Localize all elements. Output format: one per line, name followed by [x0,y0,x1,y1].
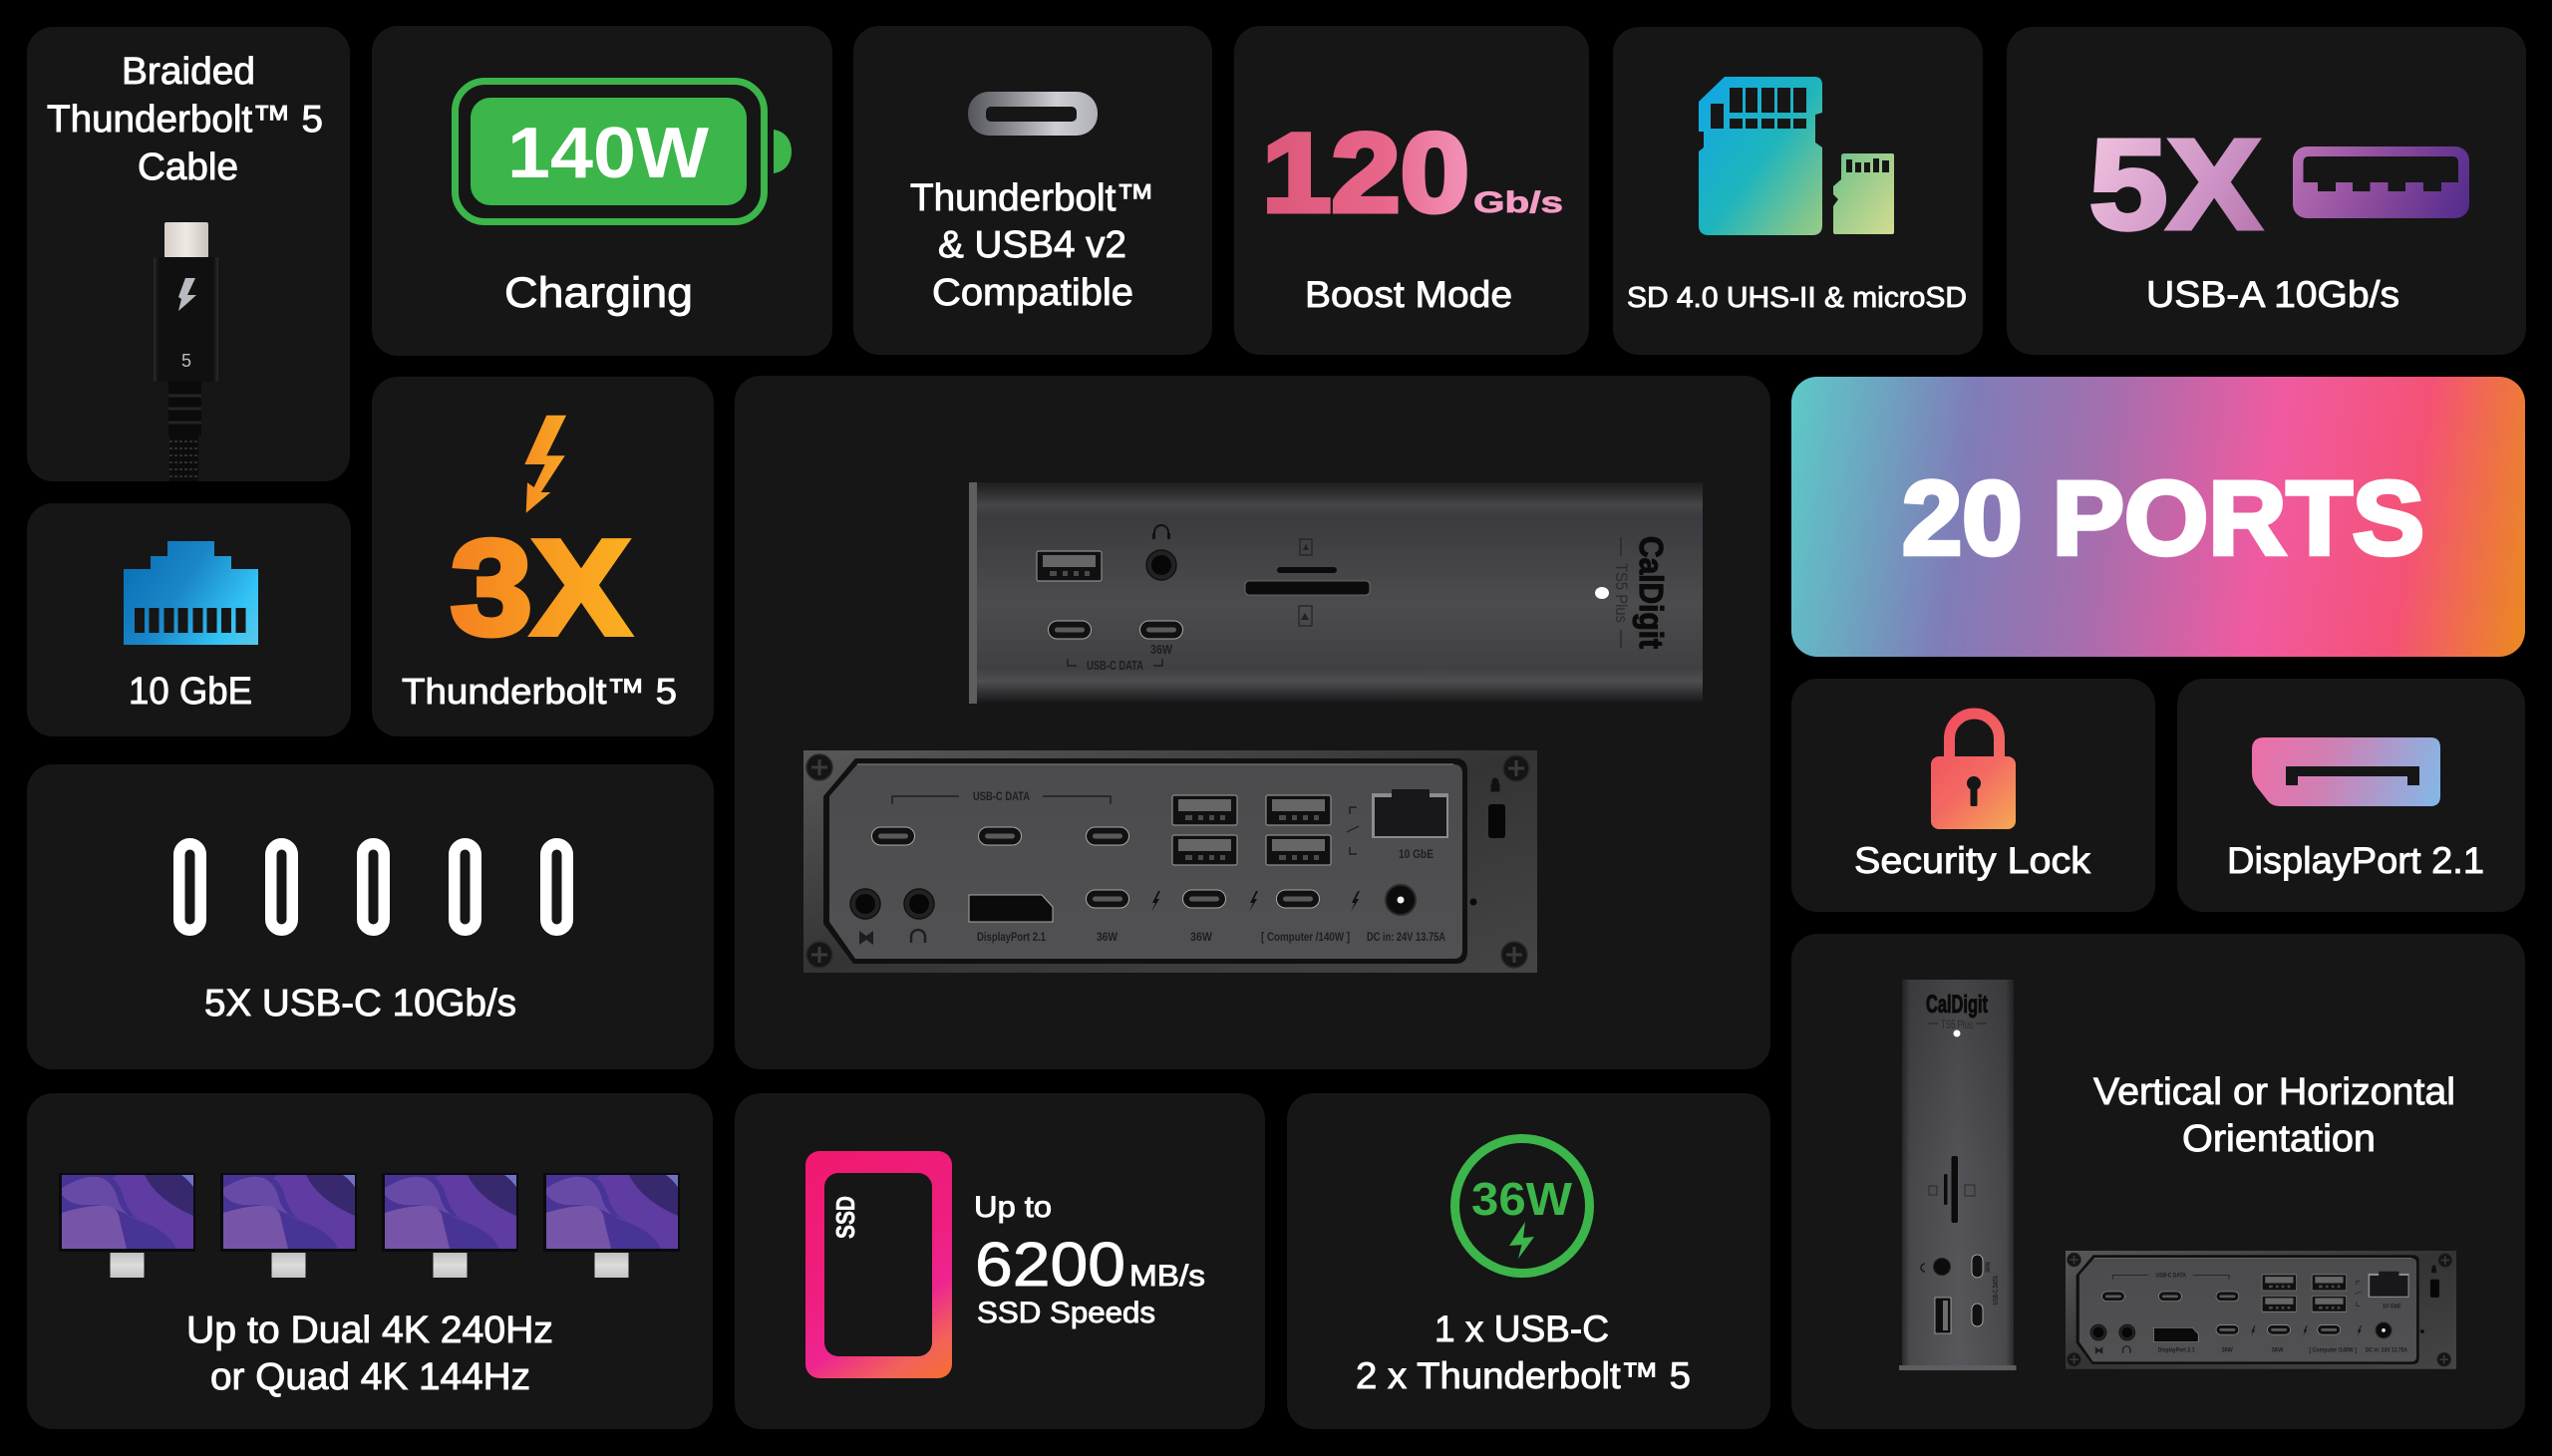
figure: 5X: 5X [2089,114,2261,256]
panel: 36W ports [1287,1093,1770,1429]
icon: microSD card [1833,153,1894,234]
icon: SSD: SSD [830,1196,860,1239]
heading: orientation: Orientation [2182,1118,2376,1160]
dock rear view: 36W [1190,930,1213,944]
heading: braided thunderbolt 5 cable [47,51,323,188]
heading: braided thunderbolt 5 cable: Braided [122,51,255,93]
panel: security lock [1791,679,2155,912]
dock front view: TS5 Plus [1612,563,1631,623]
icon: USB-C port [968,92,1098,136]
heading: orientation: Vertical or Horizontal [2093,1071,2455,1113]
icon: ethernet port [124,541,258,645]
text: up to 6200 MB/s SSD speeds: 6200 [975,1231,1125,1300]
figure: 120 Gb/s [1262,111,1563,235]
icon: thunderbolt bolt [524,416,566,513]
panel: USB-A [2007,27,2526,355]
icon: monitor 1 [59,1173,195,1278]
dock front view [969,482,1703,704]
icon: monitor 3 [382,1173,518,1278]
label: USB-C and thunderbolt counts: 2 x Thunderbolt™ 5 [1356,1355,1691,1396]
label: SD 4.0 UHS-II and microSD: SD 4.0 UHS-II & microSD [1627,282,1967,314]
icon: thunderbolt cable [154,222,218,481]
panel: boost mode [1234,26,1589,355]
panel: thunderbolt and USB4 compatible [853,26,1212,355]
panel: displayport [2177,679,2525,912]
dock rear view: 36W [1097,930,1118,944]
icon: displayport connector [2252,737,2440,806]
label: 5X USB-C 10Gb/s: 5X USB-C 10Gb/s [204,983,516,1024]
dock rear view: USB-C DATA [973,789,1030,803]
panel: 140W charging [372,26,832,356]
panel: 3X thunderbolt 5 [372,377,714,736]
label: thunderbolt USB4 v2 compatible: Compatible [932,272,1133,314]
dock rear view: [ Computer /140W ] [1261,930,1350,944]
icon: 36W circle [1455,1138,1589,1274]
label: thunderbolt USB4 v2 compatible [910,177,1154,314]
dock rear view: 10 GbE [1399,847,1434,861]
panel: braided cable [27,27,350,481]
dock vertical view: CalDigit [1926,991,1988,1019]
icon: padlock [1931,714,2016,829]
label: displayport 2.1: DisplayPort 2.1 [2227,840,2484,881]
text: up to 6200 MB/s SSD speeds: MB/s [1129,1260,1205,1293]
icon: battery: 140W [507,114,709,193]
panel: SD cards [1613,27,1983,355]
dock front view: 36W [1150,642,1173,657]
label: thunderbolt 5: Thunderbolt™ 5 [402,671,677,712]
panel: dock front and rear views [735,376,1770,1069]
dock front view: USB-C DATA [1087,658,1143,673]
figure: 120 Gb/s: Gb/s [1473,186,1563,219]
label: display support: Up to Dual 4K 240Hz [186,1310,553,1351]
dock rear view: DC in: 24V 13.75A [1367,930,1445,944]
panel: displays [27,1093,713,1429]
figure: 3X: 3X [451,512,630,663]
dock rear view, small: DisplayPort 2.1 [2158,1347,2195,1354]
dock vertical view: USB-C DATA [1993,1276,2000,1305]
label: thunderbolt USB4 v2 compatible: Thunderbolt™ [910,177,1154,219]
label: USB-C and thunderbolt counts: 1 x USB-C [1435,1309,1609,1349]
dock rear view, small: 10 GbE [2383,1304,2401,1310]
panel: 20 ports banner [1791,377,2525,657]
dock vertical view: 36W [1986,1262,1992,1273]
panel: vertical or horizontal orientation [1791,934,2525,1429]
label: boost mode: Boost Mode [1305,274,1512,315]
label: thunderbolt USB4 v2 compatible: & USB4 v2 [938,224,1126,266]
panel: 10 GbE [27,503,351,736]
heading: braided thunderbolt 5 cable: Thunderbolt™ 5 [47,99,323,141]
dock rear view: DisplayPort 2.1 [977,930,1046,944]
heading: 20 ports: 20 PORTS [1902,460,2424,577]
icon: five USB-C ports [179,844,567,930]
label: display support: or Quad 4K 144Hz [210,1356,530,1398]
panel: 5X USB-C [27,764,714,1069]
label: USB-A 10Gb/s: USB-A 10Gb/s [2146,274,2399,315]
icon: USB-A port [2293,146,2469,218]
dock rear view, small [2066,1251,2456,1369]
heading: braided thunderbolt 5 cable: Cable [138,146,238,188]
icon: monitor 4 [543,1173,680,1278]
dock rear view, small: 36W [2272,1347,2284,1354]
text: up to 6200 MB/s SSD speeds [974,1191,1205,1329]
label: USB-C and thunderbolt counts [1356,1309,1691,1396]
label: display support [186,1310,553,1398]
text: up to 6200 MB/s SSD speeds: SSD Speeds [977,1297,1155,1329]
dock vertical view: TS5 Plus [1941,1018,1973,1031]
text: up to 6200 MB/s SSD speeds: Up to [974,1191,1052,1224]
icon: 36W circle: 36W [1471,1173,1573,1225]
icon: SSD [805,1151,952,1378]
dock rear view, small: 36W [2222,1347,2234,1354]
panel: SSD speeds [735,1093,1265,1429]
label: charging: Charging [504,269,693,317]
label: 10 GbE: 10 GbE [129,671,252,713]
dock front view: CalDigit [1633,536,1670,649]
dock vertical view [1899,980,2016,1370]
icon: monitor 2 [220,1173,357,1278]
dock rear view, small: [ Computer /140W ] [2309,1347,2357,1354]
figure: 120 Gb/s: 120 [1262,111,1469,235]
heading: orientation [2093,1071,2455,1160]
dock rear view, small: DC in: 24V 13.75A [2366,1347,2407,1354]
label: security lock: Security Lock [1854,840,2091,881]
dock rear view, small: USB-C DATA [2156,1273,2186,1280]
dock rear view [803,750,1537,973]
icon: thunderbolt cable: 5 [181,351,191,371]
icon: SD card [1699,77,1822,235]
icon: battery [455,82,792,221]
